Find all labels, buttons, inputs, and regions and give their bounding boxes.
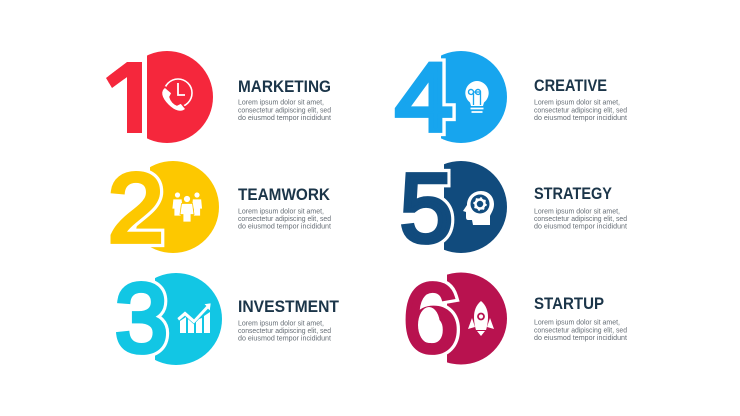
panel: 5 strategy xyxy=(401,161,627,253)
heading: TEAMWORK xyxy=(238,186,330,204)
circle: startup xyxy=(447,272,507,364)
body text xyxy=(238,98,332,122)
panel: 4 creative xyxy=(394,51,627,143)
body text: do eiusmod tempor incididunt xyxy=(534,333,628,342)
body text: consectetur adipiscing elit, sed xyxy=(238,214,331,223)
body text xyxy=(534,98,628,122)
icon: head with gear xyxy=(463,191,494,225)
heading: MARKETING xyxy=(238,78,331,96)
numeral 4: 4 xyxy=(395,44,453,152)
numeral 2: 2 xyxy=(108,154,164,262)
numeral 5: 5 xyxy=(400,155,453,263)
numeral 3: 3 xyxy=(115,265,168,373)
body text: consectetur adipiscing elit, sed xyxy=(534,214,627,223)
body text: do eiusmod tempor incididunt xyxy=(238,113,332,122)
body text: do eiusmod tempor incididunt xyxy=(534,113,628,122)
circle: teamwork xyxy=(127,161,219,253)
body text xyxy=(534,318,628,342)
icon: light bulb xyxy=(465,81,489,112)
body text: Lorem ipsum dolor sit amet, xyxy=(238,98,324,106)
numeral 6: 6 xyxy=(403,264,459,372)
body text xyxy=(238,318,332,342)
icon: growth chart xyxy=(177,303,211,333)
numeral 4: 4 xyxy=(395,44,453,152)
body text: Lorem ipsum dolor sit amet, xyxy=(534,318,620,326)
panel: 6 startup xyxy=(406,272,627,364)
heading: CREATIVE xyxy=(534,77,607,95)
body text: Lorem ipsum dolor sit amet, xyxy=(238,318,324,328)
circle: investment xyxy=(155,273,222,365)
heading: INVESTMENT xyxy=(238,298,339,316)
body text: consectetur adipiscing elit, sed xyxy=(534,106,627,114)
body text xyxy=(534,206,628,230)
body text: consectetur adipiscing elit, sed xyxy=(534,326,627,334)
circle: marketing xyxy=(147,51,213,143)
icon: phone and clock xyxy=(161,79,192,112)
heading: STRATEGY xyxy=(534,185,612,203)
body text xyxy=(238,206,332,230)
body text: consectetur adipiscing elit, sed xyxy=(238,326,331,335)
body text: Lorem ipsum dolor sit amet, xyxy=(534,206,620,216)
icon: rocket xyxy=(468,301,494,336)
body text: do eiusmod tempor incididunt xyxy=(534,222,628,230)
heading: STARTUP xyxy=(534,295,604,313)
icon: team xyxy=(172,192,202,222)
body text: Lorem ipsum dolor sit amet, xyxy=(534,98,620,106)
numeral 6: 6 xyxy=(403,264,459,372)
panel: 3 investment xyxy=(116,273,339,365)
panel: 1 marketing xyxy=(106,51,331,143)
body text: consectetur adipiscing elit, sed xyxy=(238,106,331,114)
circle: creative xyxy=(441,51,507,143)
body text: do eiusmod tempor incididunt xyxy=(238,334,332,342)
numeral 1: 1 xyxy=(99,43,155,155)
numeral 2: 2 xyxy=(108,154,164,262)
body text: do eiusmod tempor incididunt xyxy=(238,222,332,230)
numeral 3: 3 xyxy=(115,265,168,373)
panel: 2 teamwork xyxy=(110,161,331,253)
body text: Lorem ipsum dolor sit amet, xyxy=(238,206,324,216)
circle: strategy xyxy=(444,161,507,253)
numeral 5: 5 xyxy=(400,155,453,263)
